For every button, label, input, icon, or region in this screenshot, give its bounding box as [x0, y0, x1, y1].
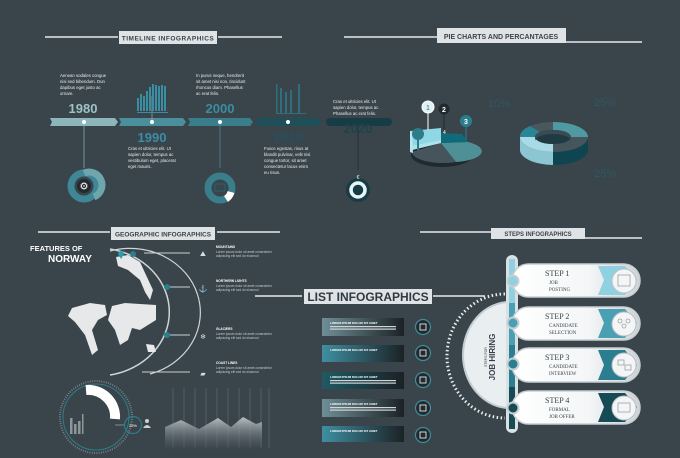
chart: 3D pie: 4 [443, 130, 446, 136]
percentage labels: 25% [594, 97, 616, 109]
chart: 3D pie: 2 [442, 107, 446, 114]
timeline text blocks: eget mauris. [128, 164, 152, 169]
timeline text blocks: sapien dolor, tempus ac [128, 152, 174, 157]
timeline chart [50, 73, 392, 202]
hiring semicircle: STEPS FOR [484, 347, 488, 367]
list items: LOREM IPSUM DOLOR SIT AMET [330, 348, 378, 352]
steps list: JOB OFFER [549, 415, 575, 420]
list items [322, 318, 430, 442]
list items: LOREM IPSUM DOLOR SIT AMET [330, 375, 378, 379]
chart: 3D pie: 1 [426, 105, 430, 112]
timeline text blocks: Aenean sodales congue [60, 73, 107, 78]
steps list: STEP 3 [545, 353, 569, 362]
geographic feature list: Lorem ipsum dolor sit amet consectetur [216, 284, 273, 288]
icon: bar chart 2010 [276, 84, 306, 114]
year labels: 2020 [344, 121, 372, 136]
year labels: 1990 [138, 130, 166, 145]
timeline arrow bar [50, 96, 392, 170]
timeline text blocks: consectetur lacus enim [264, 164, 308, 169]
geographic feature list: Lorem ipsum dolor sit amet consectetur [216, 332, 273, 336]
heading: features of norway: FEATURES OF [30, 244, 83, 253]
year labels: 2000 [206, 101, 234, 116]
geographic feature list: ⛰ [200, 251, 206, 258]
heading: geographic infographics [38, 227, 280, 240]
geographic map with arc [68, 248, 200, 375]
gauge chart [60, 381, 151, 453]
steps list: POSTING [549, 288, 571, 293]
timeline text blocks: Cras et ultricies elit. Ut [333, 99, 377, 104]
timeline text blocks: ac erat felis. [196, 91, 219, 96]
geographic feature list: Lorem ipsum dolor sit amet consectetur [216, 250, 273, 254]
geographic feature list: ▰ [200, 371, 206, 378]
list items: LOREM IPSUM DOLOR SIT AMET [330, 429, 378, 433]
timeline text blocks: vestibulum eget, placerat [128, 158, 177, 163]
heading: features of norway [30, 244, 92, 265]
heading: pie charts and percantages [344, 28, 642, 43]
year labels [69, 101, 372, 145]
steps list: STEP 4 [545, 396, 569, 405]
timeline text blocks: sit amet nisi non, tincidunt [196, 79, 246, 84]
icon: bar chart 1990 [137, 84, 168, 113]
gauge chart: 25% [129, 423, 137, 428]
steps list: JOB [549, 281, 559, 286]
timeline text blocks: rhoncus diam. Phasellus [196, 85, 243, 90]
geographic feature list: MOUNTAINS [216, 245, 235, 249]
geographic feature list: COAST LINES [216, 361, 237, 365]
geographic feature list: Lorem ipsum dolor sit amet consectetur [216, 366, 273, 370]
geographic feature list: GLACIERS [216, 327, 232, 331]
steps list: STEP 1 [545, 269, 569, 278]
timeline text blocks: Fusce egestas, risus at [264, 146, 309, 151]
icon: gear donut 1980: ⚙ [80, 182, 89, 192]
year labels: 2010 [274, 130, 302, 145]
heading: features of norway: NORWAY [48, 254, 92, 265]
geographic feature list: adipiscing elit sed do eiusmod [216, 254, 259, 258]
steps list [508, 264, 640, 424]
geographic feature list: ❄ [200, 333, 206, 341]
chart: 3D pie: 3 [464, 119, 468, 126]
timeline text blocks: dapibus eget justo ac [60, 85, 101, 90]
area chart [165, 388, 269, 450]
geographic feature list: adipiscing elit sed do eiusmod [216, 370, 259, 374]
geographic feature list: adipiscing elit sed do eiusmod [216, 336, 259, 340]
percentage labels: 10% [488, 98, 510, 110]
timeline text blocks [60, 73, 379, 175]
steps list: CANDIDATE [549, 324, 578, 329]
timeline text blocks: ornare. [60, 91, 74, 96]
icon: gear donut 1980 [71, 172, 102, 199]
heading: timeline infographics [45, 31, 282, 44]
timeline text blocks: Cras et ultricies elit. Ut [128, 146, 172, 151]
heading: list infographics: LIST INFOGRAPHICS [307, 290, 429, 304]
steps list: CANDIDATE [549, 365, 578, 370]
geographic feature list [142, 245, 273, 378]
timeline text blocks: eu risus. [264, 170, 280, 175]
list items: LOREM IPSUM DOLOR SIT AMET [330, 402, 378, 406]
heading: timeline infographics: TIMELINE INFOGRAPHICS [122, 36, 214, 42]
geographic feature list: adipiscing elit sed do eiusmod [216, 288, 259, 292]
timeline text blocks: In purus neque, hendrerit [196, 73, 245, 78]
percentage labels: 25% [594, 168, 616, 180]
steps list: SELECTION [549, 331, 577, 336]
chart: 3D donut [520, 122, 588, 165]
vertical progress bar [506, 255, 518, 433]
timeline text blocks: blandit pulvinar, velit nisi [264, 152, 310, 157]
timeline text blocks: Phasellus ac erat felis. [333, 111, 376, 116]
geographic feature list: ⚓ [199, 284, 208, 293]
timeline text blocks: sapien dolor, tempus ac [333, 105, 379, 110]
hiring semicircle [447, 294, 510, 418]
steps list: STEP 2 [545, 312, 569, 321]
steps list: INTERVIEW [549, 372, 577, 377]
heading: steps infographics [420, 228, 642, 239]
year labels: 1980 [69, 101, 97, 116]
icon: ring 2020: € [357, 175, 360, 181]
heading: list infographics [255, 289, 485, 304]
icon: monitor donut 2000 [208, 176, 232, 200]
timeline text blocks: congue tortor, sit amet [264, 158, 307, 163]
heading: steps infographics: STEPS INFOGRAPHICS [504, 232, 572, 238]
list items: LOREM IPSUM DOLOR SIT AMET [330, 321, 378, 325]
geographic feature list: NORTHERN LIGHTS [216, 279, 247, 283]
hiring semicircle: JOB HIRING [488, 334, 497, 380]
heading: geographic infographics: GEOGRAPHIC INFOGRAPHICS [115, 232, 212, 238]
heading: pie charts and percantages: PIE CHARTS AND PERCANTAGES [444, 34, 559, 41]
chart: 3D pie [410, 101, 482, 167]
percentage labels [488, 97, 620, 181]
timeline text blocks: nisi sed bibendum. Dun [60, 79, 106, 84]
icon: ring 2020 [346, 175, 370, 202]
steps list: FORMAL [549, 408, 570, 413]
